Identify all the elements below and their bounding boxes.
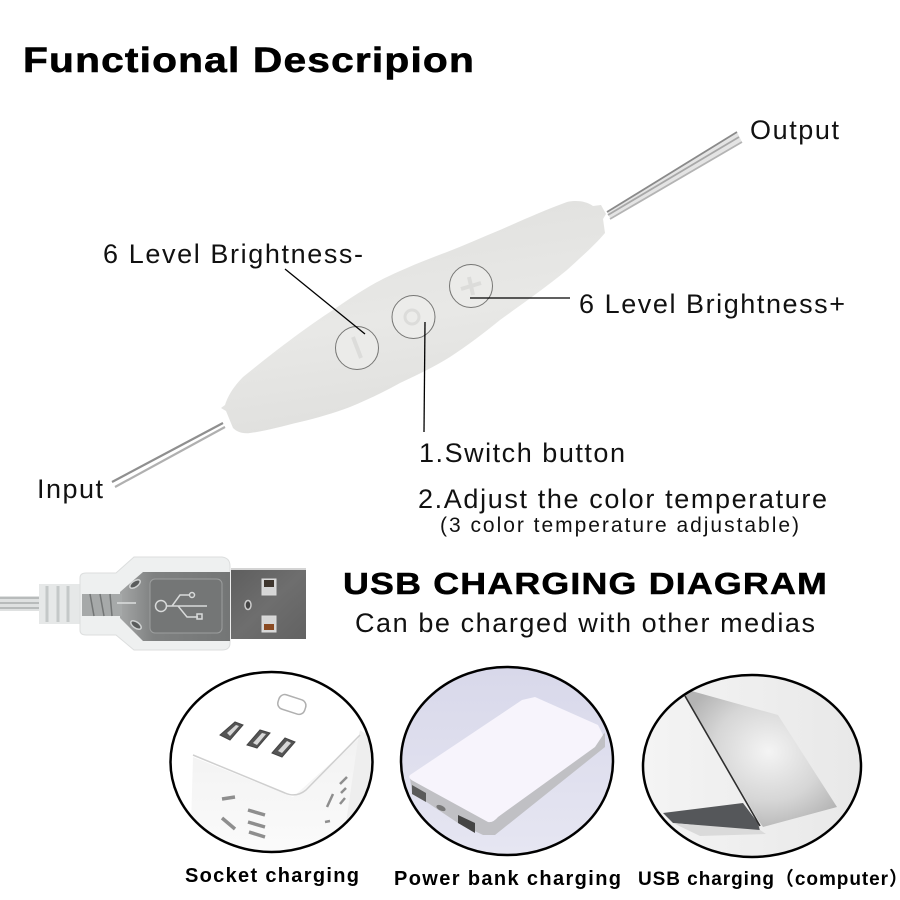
minus button [336, 326, 378, 370]
label: switch button: 1.Switch button [419, 438, 625, 468]
neck section [82, 594, 122, 616]
power bank top [409, 697, 603, 822]
right USB port [458, 815, 475, 833]
leader line: brightness plus [470, 297, 570, 299]
USB ports [220, 722, 295, 757]
circle: USB charging computer [643, 675, 861, 857]
label: input: Input [37, 474, 103, 504]
input wires [112, 423, 225, 487]
leader line: brightness minus [285, 269, 365, 334]
socket side faces [192, 739, 358, 804]
label: brightness minus: 6 Level Brightness- [103, 239, 363, 269]
output wires [607, 132, 742, 219]
caption: USB charging computer: USB charging（computer） [638, 868, 900, 890]
label: adjust colour temperature: 2.Adjust the color temperature [418, 484, 827, 514]
dark inner connector [120, 572, 230, 641]
controller body [221, 201, 606, 433]
power bank side [410, 733, 605, 835]
clear moulded housing [80, 557, 230, 650]
heading: USB charging diagram: USB CHARGING DIAGRAM [343, 566, 828, 601]
caption: socket charging: Socket charging [185, 865, 359, 887]
cable [0, 596, 42, 611]
circle: power bank charging [401, 667, 613, 855]
power button [392, 296, 435, 338]
USB symbol [156, 592, 207, 619]
label: output: Output [750, 115, 839, 145]
metal plug [231, 569, 306, 639]
icon: USB plug [0, 557, 306, 650]
plus button [450, 264, 492, 308]
strain relief [39, 584, 81, 624]
plug contact upper [262, 579, 276, 595]
outlet slots [222, 777, 347, 837]
subheading: Can be charged with other medias [355, 608, 815, 638]
title: Functional Descripion [23, 41, 475, 80]
housing clip holes [128, 578, 143, 631]
micro port [436, 804, 446, 812]
circle: socket charging [170, 672, 375, 860]
laptop base [663, 803, 760, 831]
label: colour temperature note: (3 color temperature adjustable) [440, 514, 799, 537]
power button [276, 693, 307, 716]
laptop lid [685, 690, 837, 827]
leader line: switch button [424, 322, 425, 432]
caption: power bank charging: Power bank charging [394, 868, 621, 890]
controller with wires and buttons [112, 132, 742, 487]
USB logo panel [150, 579, 222, 633]
plug contact lower [262, 616, 276, 632]
label: brightness plus: 6 Level Brightness+ [579, 289, 845, 319]
left USB port [412, 785, 426, 802]
plug hole [245, 600, 251, 610]
